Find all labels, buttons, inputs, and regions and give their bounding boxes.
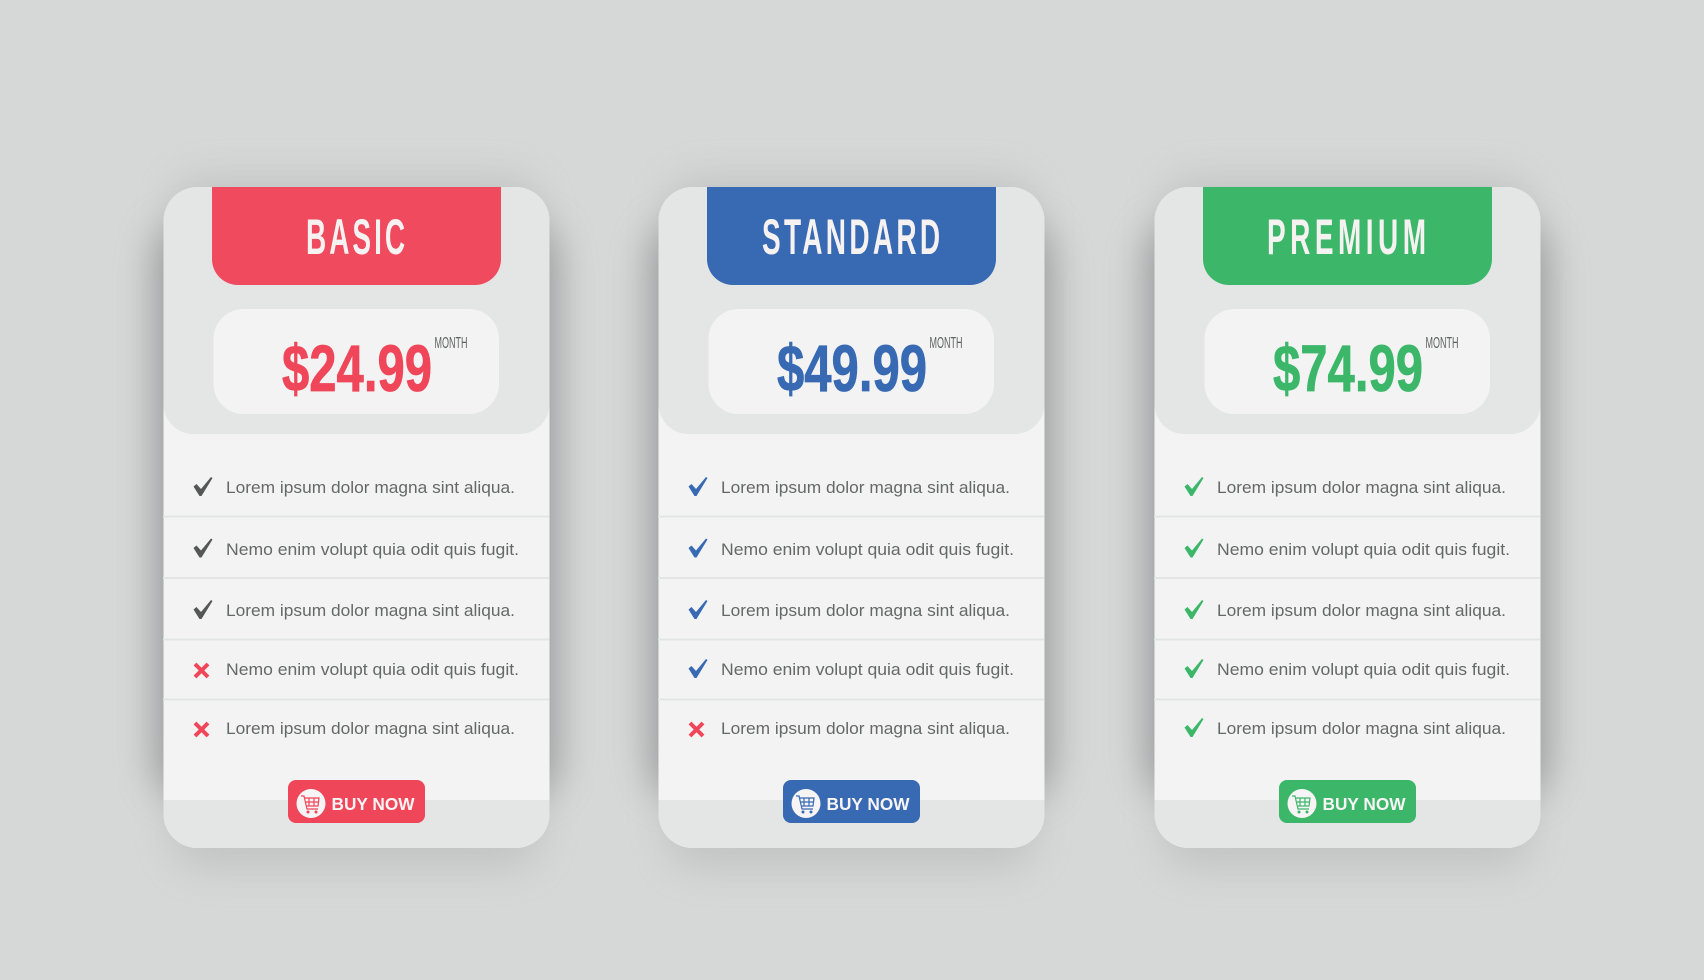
feature list: basic: Nemo enim volupt quia odit quis fugit. — [226, 541, 519, 559]
button: buy now premium: BUY NOW — [1322, 794, 1406, 814]
feature list: standard: Lorem ipsum dolor magna sint aliqua. — [721, 720, 1010, 738]
price box: premium: MONTH — [1426, 335, 1458, 352]
panel: standard plan — [651, 178, 1051, 868]
feature list: premium: Nemo enim volupt quia odit quis fugit. — [1217, 541, 1510, 559]
feature list: premium: Lorem ipsum dolor magna sint aliqua. — [1217, 720, 1506, 738]
feature list: premium: Nemo enim volupt quia odit quis fugit. — [1217, 661, 1510, 679]
panel: basic plan — [156, 178, 556, 868]
feature list: standard: Lorem ipsum dolor magna sint aliqua. — [721, 479, 1010, 497]
button: buy now standard — [783, 780, 920, 823]
heading tab: standard: STANDARD — [762, 208, 940, 265]
price box: standard: MONTH — [930, 335, 962, 352]
heading tab: standard — [707, 187, 996, 285]
feature list: basic: Lorem ipsum dolor magna sint aliqua. — [226, 720, 515, 738]
feature list: standard: Lorem ipsum dolor magna sint aliqua. — [721, 602, 1010, 620]
feature list: basic: Nemo enim volupt quia odit quis fugit. — [226, 661, 519, 679]
button: buy now basic: BUY NOW — [332, 794, 415, 814]
button: buy now basic — [288, 780, 425, 823]
feature list: standard — [658, 477, 1044, 738]
price box: basic: $24.99 — [282, 331, 432, 405]
button: buy now standard: BUY NOW — [826, 794, 910, 814]
heading tab: basic — [212, 187, 501, 285]
panel: premium plan — [1147, 178, 1547, 868]
price box: basic: MONTH — [434, 335, 468, 352]
button: buy now premium — [1279, 780, 1416, 823]
price box: standard: $49.99 — [777, 331, 927, 405]
feature list: standard: Nemo enim volupt quia odit quis fugit. — [721, 541, 1014, 559]
heading tab: premium: PREMIUM — [1267, 208, 1426, 265]
price box: premium: $74.99 — [1273, 331, 1423, 405]
price box: basic — [214, 309, 499, 414]
feature list: standard: Nemo enim volupt quia odit quis fugit. — [721, 661, 1014, 679]
feature list: basic — [163, 477, 549, 738]
heading tab: basic: BASIC — [306, 208, 405, 265]
feature list: basic: Lorem ipsum dolor magna sint aliqua. — [226, 602, 515, 620]
feature list: basic: Lorem ipsum dolor magna sint aliqua. — [226, 479, 515, 497]
heading tab: premium — [1203, 187, 1492, 285]
price box: premium — [1204, 309, 1490, 414]
price box: standard — [708, 309, 994, 414]
feature list: premium — [1154, 477, 1540, 738]
feature list: premium: Lorem ipsum dolor magna sint aliqua. — [1217, 602, 1506, 620]
feature list: premium: Lorem ipsum dolor magna sint aliqua. — [1217, 479, 1506, 497]
